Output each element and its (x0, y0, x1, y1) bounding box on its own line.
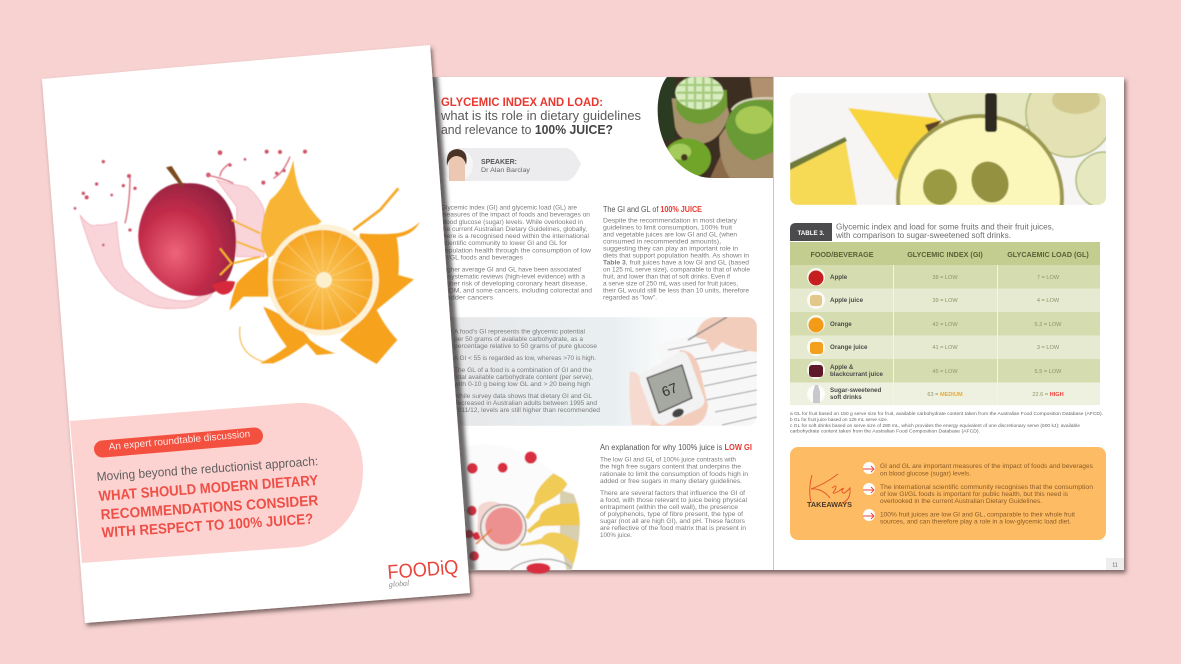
table body (790, 242, 1100, 405)
orange slice (268, 224, 379, 336)
text block: the GI and GL of 100% juice: guidelines to limit consumption, 100% fruit (603, 224, 732, 232)
table body: FOOD/BEVERAGE (810, 250, 874, 259)
text block: the GI and GL of 100% juice (603, 205, 750, 302)
row: sugar-sweetened soft drinks: 22.6 = HIGH (1032, 392, 1064, 398)
table footnotes: c GL for soft drinks based on serve size of 280 mL, which provides the energy equivalent of one discretionary serve (600 kJ); available (790, 423, 1081, 428)
text block: why 100% juice is low GI: sugar (not all are high GI), and pH. These factors (600, 518, 745, 525)
speaker badge: Dr Alan Barclay (481, 168, 530, 174)
takeaway 1: on blood glucose (sugar) levels. (880, 470, 971, 478)
text block: the GI and GL of 100% juice: their GL would still be less than 10 units, therefore (603, 288, 749, 295)
photo: green juice jars (650, 76, 774, 180)
row: orange juice (807, 338, 1060, 356)
row: apple and blackcurrant juice (807, 361, 1062, 379)
text block: GI and GL intro: population health through the consumption of low (441, 247, 591, 254)
row: orange juice: 3 = LOW (1037, 345, 1060, 351)
panel: open brochure spread (432, 76, 1130, 576)
apple (664, 138, 711, 178)
text block: why 100% juice is low GI: a food, with those relevant to juice being physical (600, 497, 747, 504)
text block: the GI and GL of 100% juice: and vegetable juices are low GI and GL (when (603, 232, 737, 238)
takeaway 2: The international scientific community recognises that the consumption (880, 484, 1093, 491)
text block: GI and GL intro: GI/GL foods and beverages (441, 254, 523, 262)
row: apple juice: 39 = LOW (932, 298, 958, 304)
cover heading (96, 454, 319, 541)
text block: why 100% juice is low GI: An explanation for why 100% juice is LOW GI (600, 443, 752, 452)
text block: GI and GL intro: in systematic reviews (high-level evidence) with a (441, 274, 585, 280)
takeaway 2 (863, 483, 1093, 505)
takeaway 2: overlooked in the current Australian Dietary Guidelines. (880, 498, 1042, 505)
table caption (835, 222, 1054, 240)
panel: key takeaways (790, 447, 1106, 540)
tag: expert roundtable: An expert roundtable discussion (108, 429, 251, 453)
table caption: Glycemic index and load for some fruits and their fruit juices, (836, 222, 1054, 232)
text block: GI explanation: The GL of a food is a combination of GI and the (454, 367, 592, 374)
text block: GI and GL intro (441, 204, 592, 302)
row: apple juice: Apple juice (830, 297, 864, 304)
text block: why 100% juice is low GI: are reflective of the food matrix that is present in (600, 525, 746, 532)
text block: GI and GL intro: Higher average GI and GL have been associated (441, 266, 581, 274)
text block: the GI and GL of 100% juice: regarded as "low". (603, 295, 657, 302)
meter reading: 67 (659, 379, 680, 400)
text block: the GI and GL of 100% juice: diets that support population health. As shown in (603, 252, 749, 260)
heading: glycemic index and load: what is its role in dietary guidelines (440, 109, 641, 123)
text block: GI and GL intro: bladder cancers (441, 294, 493, 302)
text block: GI and GL intro: Glycemic index (GI) and glycemic load (GL) are (441, 204, 577, 212)
text block: the GI and GL of 100% juice: consumed in recommended amounts), (603, 238, 721, 246)
cover heading: WITH RESPECT TO 100% JUICE? (101, 511, 314, 541)
table footnotes (790, 411, 1103, 434)
text block: GI and GL intro: T2DM, and some cancers, including colorectal and (441, 288, 592, 294)
table body: GLYCAEMIC LOAD (GL) (1007, 250, 1089, 259)
orange splash (229, 160, 420, 364)
page number: 11 (1112, 562, 1118, 568)
cover edge shadow (434, 75, 472, 572)
speaker badge (441, 148, 581, 181)
text block: GI explanation: While survey data shows that dietary GI and GL (454, 393, 592, 400)
text block: GI and GL intro: higher risk of developing coronary heart disease, (441, 280, 587, 288)
heading: glycemic index and load: GLYCEMIC INDEX AND LOAD: (441, 95, 603, 109)
text block: why 100% juice is low GI: entrapment (within the cell wall), the presence (600, 504, 738, 511)
text block: GI explanation: decreased in Australian adults between 1995 and (454, 400, 597, 407)
photo: smoothie, bananas and raspberries (463, 444, 582, 574)
raspberries (465, 452, 550, 574)
text block: GI and GL intro: there is a recognised need within the international (441, 233, 589, 240)
row: orange juice: 41 = LOW (932, 345, 958, 351)
text block: the GI and GL of 100% juice: on 125 mL serve size), comparable to that of whole (603, 267, 750, 274)
row: sugar-sweetened soft drinks: soft drinks (830, 394, 862, 401)
key script heading: TAKEAWAYS (807, 500, 852, 509)
row: orange: 42 = LOW (932, 322, 958, 328)
text block: why 100% juice is low GI: of polyphenols, type of fibre present, the type of (600, 511, 743, 518)
takeaway 2: of low GI/GL foods is important for public health, but this need is (880, 491, 1069, 498)
row: apple juice: 4 = LOW (1037, 298, 1060, 304)
row: orange: 5.2 = LOW (1035, 322, 1062, 328)
row: apple and blackcurrant juice: blackcurrant juice (830, 371, 884, 378)
jar two (719, 128, 774, 178)
bananas (520, 473, 582, 570)
takeaway 3: 100% fruit juices are low GI and GL, comparable to their whole fruit (880, 512, 1075, 518)
panel: left page header (440, 76, 774, 181)
text block: GI explanation: with 0-10 g being low GL and > 20 being high (453, 381, 590, 388)
row: apple (807, 268, 1060, 286)
table footnotes: b GL for fruit juice based on 125 mL serve size. (790, 417, 888, 422)
table footnotes: a GL for fruit based on 150 g serve size for fruit, available carbohydrate content taken from the Australian Food Composition Database (AFCD). (790, 411, 1103, 416)
apple (138, 183, 236, 296)
text block: why 100% juice is low GI: The low GI and GL of 100% juice contrasts with (600, 456, 736, 464)
key script heading (807, 474, 852, 509)
text block: the GI and GL of 100% juice: fruit, and lower than that of soft drinks. Even if (603, 274, 730, 281)
table caption: with comparison to sugar-sweetened soft drinks. (835, 231, 1011, 240)
table tab: TABLE 3. (797, 230, 825, 237)
text block: GI explanation (453, 328, 600, 414)
text block: the GI and GL of 100% juice: Despite the recommendation in most dietary (603, 218, 738, 224)
text block: GI and GL intro: the current Australian Dietary Guidelines, globally, (441, 226, 587, 233)
cover heading: WHAT SHOULD MODERN DIETARY (98, 473, 319, 505)
text block: GI explanation: A GI < 55 is regarded as low, whereas >70 is high. (454, 355, 596, 362)
table footnotes: carbohydrate content taken from the Australian Food Composition Database (AFCD). (790, 428, 980, 434)
page number (1106, 558, 1124, 570)
takeaway 1 (863, 462, 1094, 478)
panel: glucose meter band (440, 317, 757, 426)
row: apple and blackcurrant juice: Apple & (830, 364, 854, 371)
photo: glucose meter and chart (440, 317, 757, 426)
text block: GI explanation: per 50 grams of available carbohydrate, as a (454, 336, 583, 343)
row: apple and blackcurrant juice: 5.5 = LOW (1035, 369, 1062, 375)
text block: GI explanation: A food's GI represents the glycemic potential (454, 328, 585, 336)
row: orange juice: Orange juice (830, 344, 868, 351)
text block: the GI and GL of 100% juice: Table 3, fruit juices have a low GI and GL (based (603, 260, 749, 267)
text block: GI explanation: 2011/12, levels are still higher than recommended (454, 407, 600, 414)
row: orange (807, 315, 1062, 333)
pink juice splash (80, 180, 264, 309)
row: apple: 38 = LOW (932, 275, 958, 281)
text block: the GI and GL of 100% juice: The GI and GL of 100% JUICE (603, 205, 702, 214)
row: sugar-sweetened soft drinks: 63 = MEDIUM (927, 392, 963, 398)
panel: front cover (42, 45, 470, 623)
row: orange: Orange (830, 321, 852, 328)
text block: why 100% juice is low GI: added or free sugars in many dietary guidelines. (600, 478, 742, 485)
smoothie glass (477, 501, 500, 547)
text block: GI and GL intro: measures of the impact of foods and beverages on (441, 212, 590, 219)
text block: GI explanation: percentage relative to 50 grams of pure glucose (454, 343, 597, 350)
logo: FOODiQ global: FOODiQ (387, 556, 459, 584)
takeaway 3: sources, and can therefore play a role in a low-glycemic load diet. (880, 518, 1071, 526)
text block: why 100% juice is low GI: There are several factors that influence the GI of (600, 490, 745, 497)
text block: the GI and GL of 100% juice: suggesting they can play an important role in (603, 246, 738, 252)
takeaway 3 (863, 509, 1075, 526)
panel: title band (70, 403, 363, 563)
heading: glycemic index and load: and relevance to 100% JUICE? (441, 123, 613, 137)
jar one (672, 98, 729, 144)
takeaway 1: GI and GL are important measures of the impact of foods and beverages (880, 463, 1094, 470)
row: apple: Apple (830, 274, 848, 281)
table body: GLYCEMIC INDEX (GI) (907, 250, 983, 259)
text block: GI and GL intro: scientific community to lower GI and GL for (441, 240, 568, 247)
text block: the GI and GL of 100% juice: a serve size of 250 mL was used for fruit juices, (603, 281, 738, 288)
text block: why 100% juice is low GI: the high free sugars content that underpins the (600, 464, 741, 470)
text block: why 100% juice is low GI: 100% juice. (600, 532, 632, 539)
row: apple and blackcurrant juice: 45 = LOW (932, 369, 958, 375)
text block: GI and GL intro: blood glucose (sugar) levels. While overlooked in (441, 219, 583, 226)
cover heading: Moving beyond the reductionist approach: (96, 454, 319, 484)
logo: FOODiQ global: global (388, 578, 410, 589)
speaker badge: SPEAKER: (481, 159, 517, 166)
heading: glycemic index and load (440, 95, 641, 137)
row: sugar-sweetened soft drinks: Sugar-sweetened (830, 387, 881, 394)
row: sugar-sweetened soft drinks (807, 385, 1064, 403)
illustration: apple and orange juice splash (74, 150, 420, 364)
text block: why 100% juice is low GI (600, 443, 752, 539)
panel: table 3 (790, 222, 1103, 434)
cover heading: RECOMMENDATIONS CONSIDER (100, 493, 319, 523)
row: apple juice (807, 291, 1060, 309)
text block: why 100% juice is low GI: rationale to limit the consumption of foods high in (600, 471, 748, 478)
table tab (790, 223, 832, 241)
row: apple: 7 = LOW (1037, 275, 1060, 281)
text block: GI explanation: total available carbohydrate content (per serve), (454, 374, 593, 381)
photo: pineapple and yellow smoothie (790, 93, 1106, 205)
